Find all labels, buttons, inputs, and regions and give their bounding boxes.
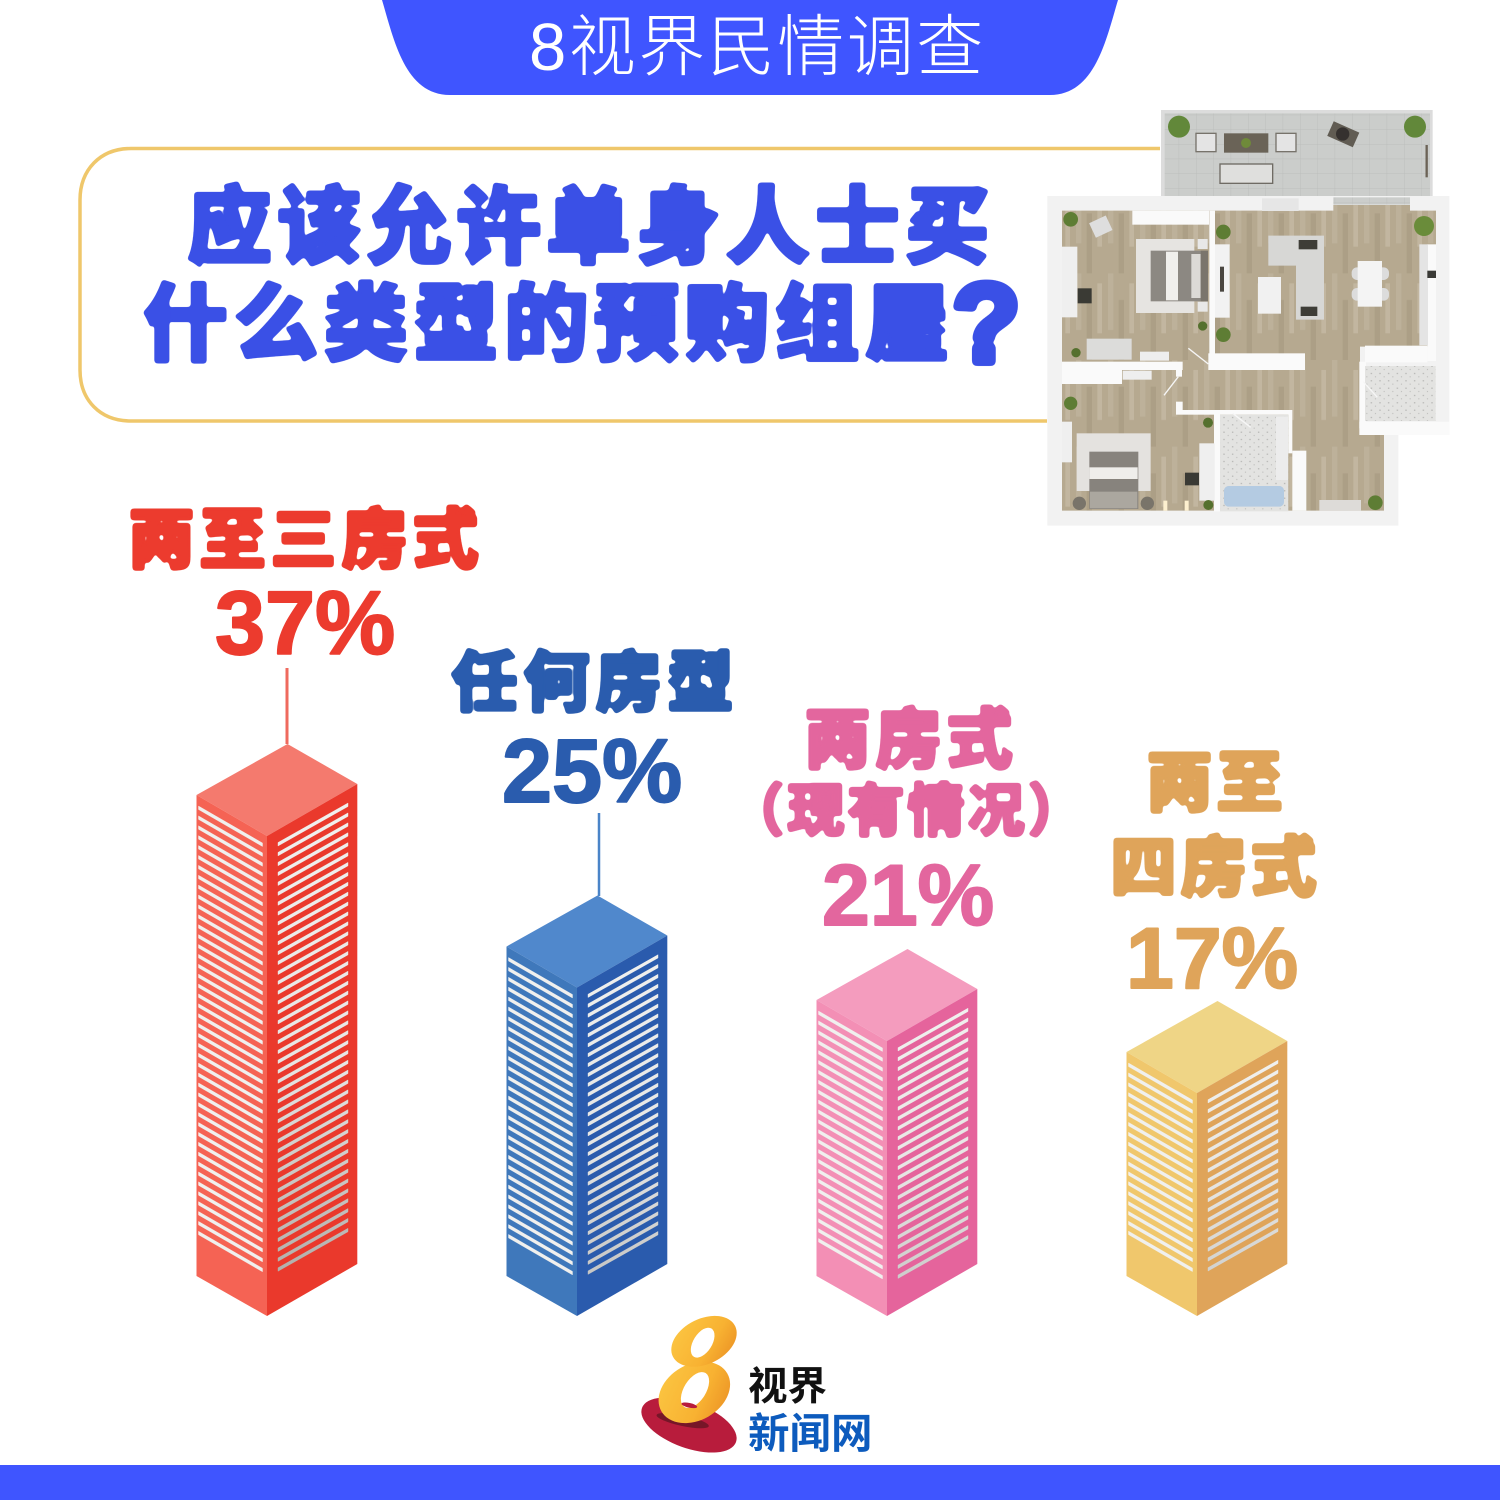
bar: two to three rooms 37%: [128, 503, 483, 1316]
building: [506, 896, 668, 1316]
headline: 应该允许单身人士买: [187, 181, 994, 276]
value: 25%: [502, 722, 682, 822]
bedroom two: [1062, 397, 1383, 511]
header tab: [382, 0, 1118, 95]
question panel: [80, 148, 1160, 421]
label second line: 四房式: [1110, 831, 1320, 906]
bar: two rooms current situation 21%: [763, 704, 1049, 1316]
apartment walls: [1047, 196, 1449, 526]
label: 两至: [1146, 746, 1286, 821]
wood floors: [1062, 205, 1436, 511]
headline: [143, 181, 1020, 386]
value: 21%: [822, 848, 994, 944]
logo figure eight: [647, 1306, 745, 1436]
logo: [634, 1306, 873, 1464]
bar: any flat type 25%: [451, 646, 739, 1423]
terrace: [1161, 110, 1433, 197]
building: [196, 744, 357, 1316]
floor plan illustration: [1047, 110, 1449, 526]
building: [1126, 1001, 1288, 1316]
logo: 新闻网: [748, 1410, 873, 1457]
bathrooms: [1220, 366, 1436, 511]
value: 37%: [215, 574, 395, 674]
headline: 什么类型的预购组屋: [143, 278, 955, 373]
label: 两至三房式: [128, 503, 483, 578]
logo red disc: [634, 1386, 744, 1464]
leader line: [598, 813, 600, 896]
bedroom one: [1062, 212, 1208, 380]
label: 两房式: [804, 703, 1017, 778]
header title: 8视界民情调查: [529, 10, 986, 85]
building: [816, 949, 978, 1316]
interior walls: [1062, 198, 1449, 511]
bar: two to four rooms 17%: [1113, 750, 1317, 1316]
headline: ?: [952, 261, 1020, 386]
value: 17%: [1126, 911, 1298, 1007]
logo text: 视界: [748, 1365, 827, 1409]
bottom band: [0, 1465, 1500, 1500]
sublabel: （现有情况）: [727, 779, 1087, 844]
label: 任何房型: [451, 646, 739, 721]
leader line: [286, 668, 288, 744]
living and dining furniture: [1164, 216, 1436, 427]
